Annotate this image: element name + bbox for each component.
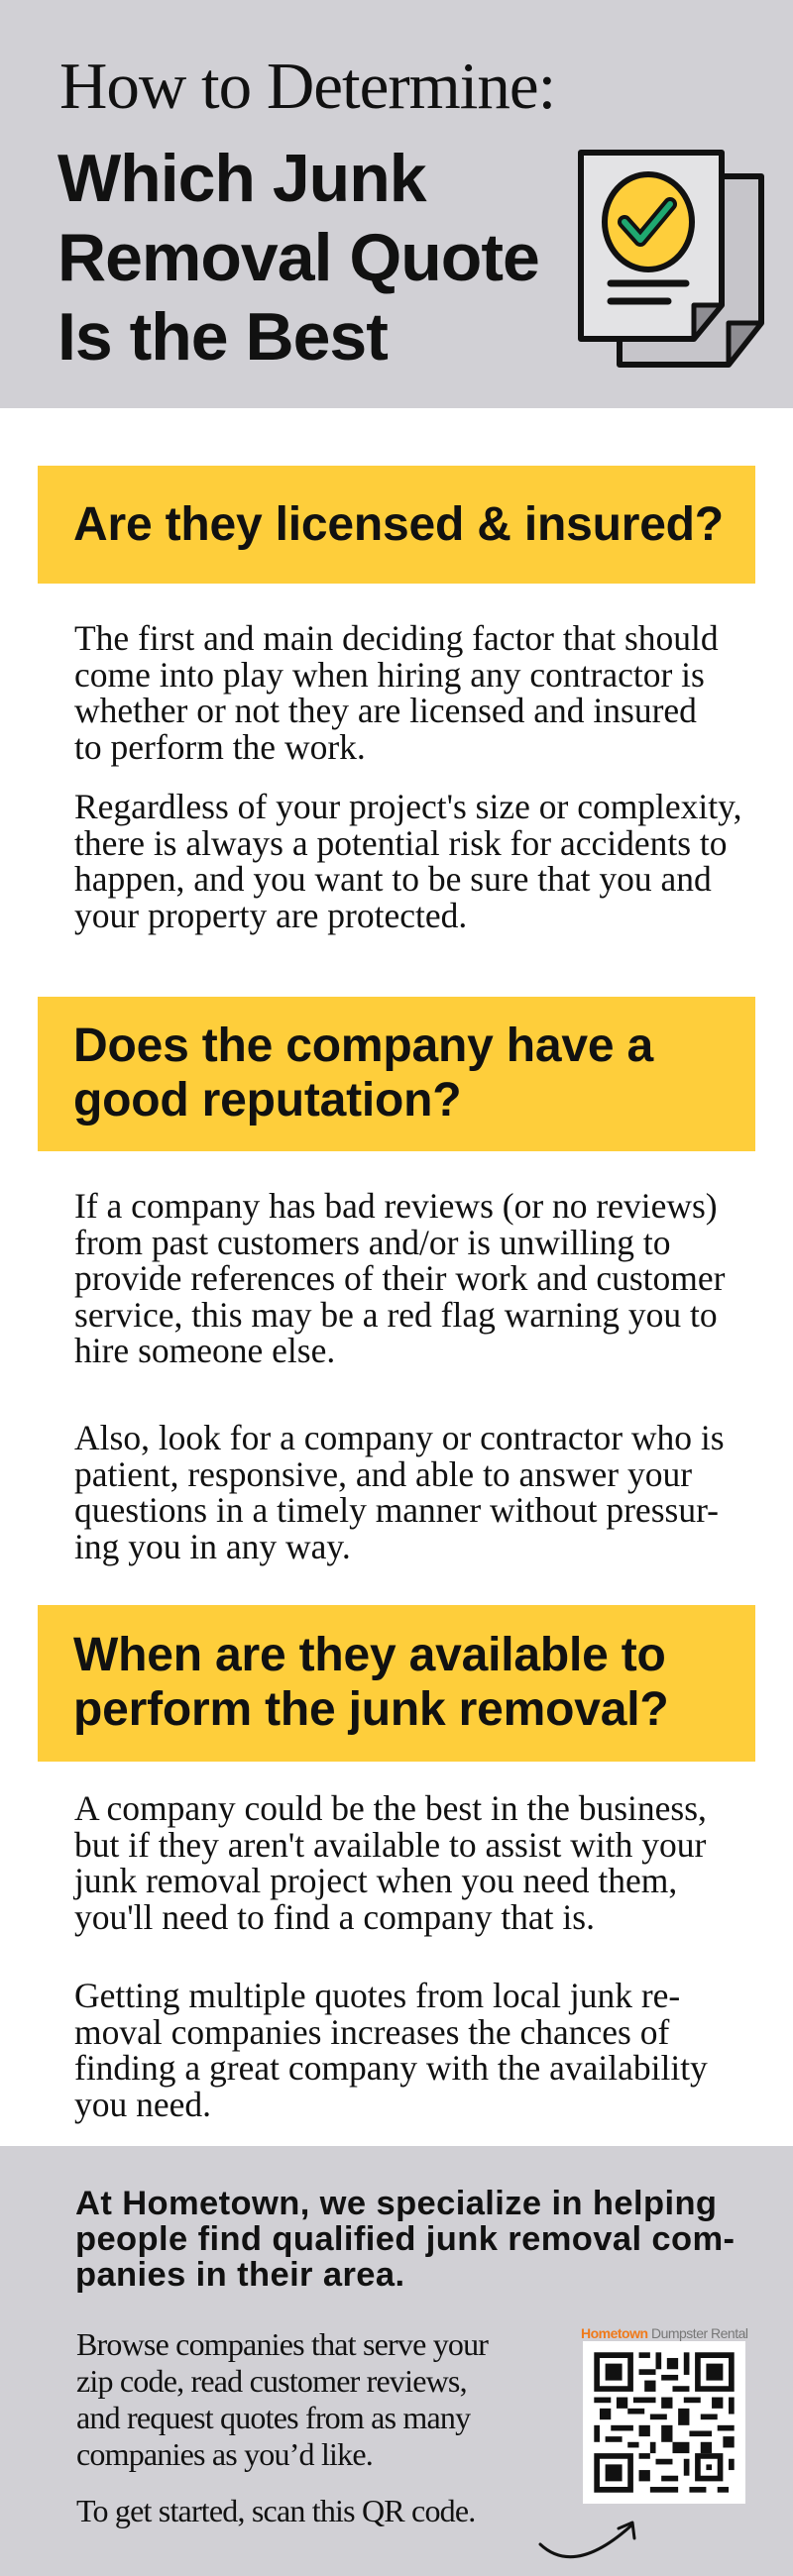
text block: multiple quotes: finding a great company with the availability bbox=[74, 2048, 708, 2088]
footer body text: companies as you’d like. bbox=[76, 2436, 373, 2472]
text block: licensing bbox=[74, 618, 719, 767]
arrow: curved to QR bbox=[538, 2521, 636, 2558]
text block: patience: patient, responsive, and able to answer your bbox=[74, 1454, 692, 1494]
heading bar: licensed & insured bbox=[38, 466, 755, 584]
title: main heading: Which Junk bbox=[57, 141, 426, 216]
footer heading bbox=[75, 2185, 735, 2294]
footer body text: Browse companies that serve your bbox=[76, 2326, 488, 2362]
text block: patience: ing you in any way. bbox=[74, 1526, 351, 1565]
text block: patience: questions in a timely manner without pressur- bbox=[74, 1490, 719, 1530]
footer heading: panies in their area. bbox=[75, 2256, 404, 2294]
heading bar: licensed & insured: Are they licensed & insured? bbox=[73, 498, 724, 551]
text block: availability: A company could be the best in the business, bbox=[74, 1788, 707, 1828]
footer heading: people find qualified junk removal com- bbox=[75, 2220, 735, 2258]
text block: reviews: If a company has bad reviews (or no reviews) bbox=[74, 1186, 718, 1226]
text block: licensing: whether or not they are licensed and insured bbox=[74, 691, 697, 730]
text block: licensing: The first and main deciding factor that should bbox=[74, 618, 719, 658]
text block: accidents: there is always a potential risk for accidents to bbox=[74, 822, 728, 862]
text block: patience bbox=[74, 1418, 725, 1565]
text block: reviews bbox=[74, 1186, 726, 1370]
header panel bbox=[0, 0, 793, 408]
text block: multiple quotes bbox=[74, 1976, 708, 2124]
text block: availability bbox=[73, 1788, 707, 1936]
title: main heading: Removal Quote bbox=[57, 220, 539, 295]
heading bar: reputation: good reputation? bbox=[73, 1074, 461, 1127]
text block: reviews: hire someone else. bbox=[74, 1331, 335, 1370]
text block: accidents: Regardless of your project's size or complexity, bbox=[74, 787, 741, 826]
footer body text bbox=[76, 2326, 489, 2472]
text block: reviews: service, this may be a red flag warning you to bbox=[74, 1294, 718, 1334]
heading bar: availability bbox=[38, 1605, 755, 1762]
text block: availability: you'll need to find a company that is. bbox=[74, 1896, 595, 1936]
text block: reviews: provide references of their work and customer bbox=[74, 1258, 725, 1298]
footer panel bbox=[0, 2146, 793, 2576]
text block: multiple quotes: Getting multiple quotes from local junk re- bbox=[74, 1976, 680, 2015]
logo text: Hometown Dumpster Rental bbox=[581, 2325, 747, 2341]
footer body text: zip code, read customer reviews, bbox=[76, 2363, 467, 2399]
QR code bbox=[583, 2341, 745, 2504]
text block: multiple quotes: you need. bbox=[74, 2085, 211, 2124]
text block: availability: but if they aren't available to assist with your bbox=[74, 1825, 706, 1865]
text block: availability: junk removal project when you need them, bbox=[74, 1861, 677, 1900]
footer body text: and request quotes from as many bbox=[76, 2400, 470, 2435]
text block: accidents: your property are protected. bbox=[74, 896, 467, 935]
text block: patience: Also, look for a company or contractor who is bbox=[74, 1418, 725, 1457]
title: main heading: Is the Best bbox=[57, 299, 388, 375]
heading bar: reputation: Does the company have a bbox=[73, 1020, 653, 1072]
text block: accidents bbox=[74, 787, 741, 935]
text block: multiple quotes: moval companies increases the chances of bbox=[74, 2011, 669, 2051]
text block: licensing: come into play when hiring any contractor is bbox=[74, 654, 705, 694]
text block: reviews: from past customers and/or is unwilling to bbox=[74, 1223, 670, 1262]
heading bar: reputation bbox=[38, 997, 755, 1151]
heading bar: availability: perform the junk removal? bbox=[73, 1683, 668, 1736]
heading bar: availability: When are they available to bbox=[73, 1629, 666, 1681]
text block: accidents: happen, and you want to be sure that you and bbox=[74, 859, 712, 899]
text block: licensing: to perform the work. bbox=[74, 727, 366, 767]
footer call to action: To get started, scan this QR code. bbox=[76, 2493, 475, 2528]
footer heading: At Hometown, we specialize in helping bbox=[75, 2185, 717, 2222]
icon: document with checkmark bbox=[578, 150, 764, 368]
title: main heading bbox=[57, 141, 539, 375]
title: how to determine: How to Determine: bbox=[59, 50, 555, 123]
